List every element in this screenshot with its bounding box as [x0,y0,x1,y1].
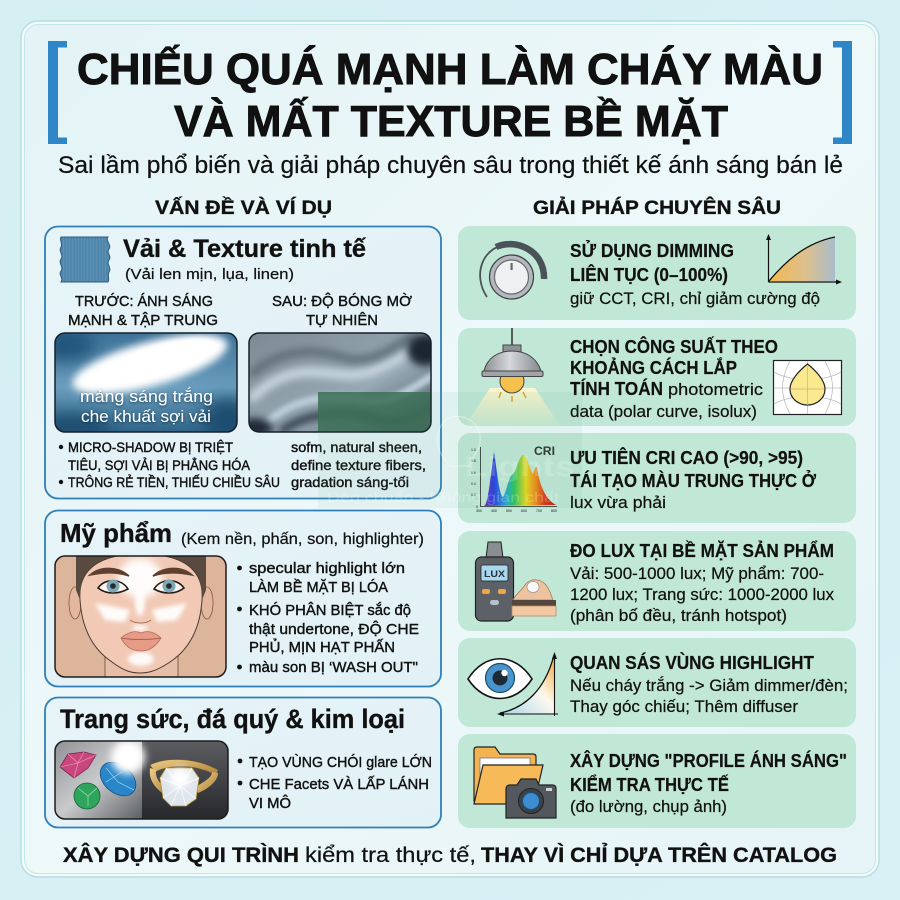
heading: in-depth solutions: GIẢI PHÁP CHUYÊN SÂU [533,197,781,219]
CRI text: ƯU TIÊN CRI CAO (>90, >95) [570,447,803,468]
before label: MẠNH & TẬP TRUNG [68,312,218,329]
icon: eye [468,659,532,698]
watermark: Đèn chuẩn - Không gian chất [327,489,559,505]
profile text [570,750,847,816]
lux text: 1200 lux; Trang sức: 1000-2000 lux [570,586,835,604]
card: high CRI [458,433,856,523]
card: lighting profile [458,734,856,828]
chart: light spectrum [471,446,557,513]
chart: light spectrum: 600 [521,509,527,513]
profile text: (đo lường, chụp ảnh) [570,798,727,816]
chart: light spectrum: 0.8 [471,459,476,463]
icon: pendant lamp [465,328,560,426]
lux text: ĐO LUX TẠI BỀ MẶT SẢN PHẨM [570,540,834,561]
left bracket [48,41,67,144]
cosmetics heading: Mỹ phẩm [60,518,172,548]
fabric heading: Vải & Texture tinh tế [123,235,366,263]
cosmetics bullet list: KHÓ PHÂN BIỆT sắc độ [249,602,411,619]
chart: light spectrum: 0.4 [471,482,476,486]
caption on image [80,387,213,426]
jewelry bullet list [238,754,432,812]
panel: fabric and texture [30,226,443,498]
before bullet list: MICRO-SHADOW BỊ TRIỆT [68,440,233,455]
before bullet list: TIÊU, SỢI VẢI BỊ PHẲNG HÓA [68,458,250,473]
footer takeaway: XÂY DỰNG QUI TRÌNH [63,843,299,867]
title: CHIẾU QUÁ MẠNH LÀM CHÁY MÀU [77,44,823,94]
after description [291,439,426,490]
lux text: Vải: 500-1000 lux; Mỹ phẩm: 700- [570,565,824,583]
wattage text: CHỌN CÔNG SUẤT THEO [570,336,778,357]
chart: light spectrum: 700 [536,509,542,513]
caption on image: mảng sáng trắng [80,387,213,406]
cosmetics bullet list: màu son BỊ ‘WASH OUT" [249,659,418,676]
caption on image: che khuất sợi vải [81,408,211,426]
after label: TỰ NHIÊN [306,312,378,329]
chart: polar isolux diagram [774,360,842,414]
icon: folder and camera [474,747,556,818]
cosmetics bullet list: specular highlight lớn [249,560,405,577]
card: observe highlight [458,638,856,727]
chart: light spectrum: 0.6 [471,471,476,475]
highlight text: Nếu cháy trắng -> Giảm dimmer/đèn; [570,676,848,695]
watermark [318,392,582,508]
cosmetics bullet list: thật undertone, ĐỘ CHE [249,621,419,638]
heading: problems and examples: VẤN ĐỀ VÀ VÍ DỤ [155,197,332,219]
card: dimming [458,226,856,320]
dimming text: giữ CCT, CRI, chỉ giảm cường độ [570,289,820,308]
watermark: Lights [465,451,575,482]
jewelry bullet list: VI MÔ [249,795,291,812]
chart: light spectrum: 500 [506,509,512,513]
chart: light spectrum: 0 [476,505,478,509]
chart: light spectrum: 300 [476,509,482,513]
jewelry bullet list: CHE Facets VÀ LẤP LÁNH [249,776,429,793]
before label [68,293,218,329]
highlight text [570,652,848,716]
lux text [570,540,835,625]
footer takeaway: kiểm tra thực tế, [305,844,476,867]
cosmetics bullet list [237,560,419,676]
dimming text: SỬ DỤNG DIMMING [570,240,734,261]
chart: light spectrum: 0.2 [471,493,476,497]
after label [272,293,412,329]
dimming text [570,240,820,308]
highlight text: Thay góc chiếu; Thêm diffuser [570,698,799,716]
chart: light spectrum: 400 [491,509,497,513]
card: measure lux [458,531,856,631]
jewelry heading: Trang sức, đá quý & kim loại [60,704,405,734]
jewelry bullet list: TẠO VÙNG CHÓI glare LỚN [249,754,432,771]
after description: gradation sáng-tối [291,474,409,490]
wattage text: photometric [668,381,763,399]
icon: fabric swatch [60,237,110,282]
chart: light spectrum: 1.0 [471,448,476,452]
profile text: KIỂM TRA THỰC TẾ [570,774,729,795]
before bullet list: TRÔNG RẺ TIỀN, THIẾU CHIỀU SÂU [68,475,280,490]
chart: light spectrum: CRI [534,446,555,458]
image: soft satin sheen [248,332,432,433]
after label: SAU: ĐỘ BÓNG MỜ [272,293,412,310]
subtitle: Sai lầm phổ biến và giải pháp chuyên sâu trong thiết kế ánh sáng bán lẻ [58,152,843,179]
icon: lux meter and product: LUX [484,569,506,580]
icon: lux meter and product [476,542,556,621]
title [77,44,823,146]
image: gems and diamond ring [55,740,228,819]
CRI text: lux vừa phải [570,493,666,512]
before bullet list [59,440,280,490]
profile text: XÂY DỰNG "PROFILE ÁNH SÁNG" [570,750,847,771]
chart: dimming curve [766,234,842,284]
footer takeaway: THAY VÌ CHỈ DỰA TRÊN CATALOG [481,843,837,867]
watermark tint over image [318,392,431,432]
image: overexposed fabric [54,332,238,433]
after description: sofm, natural sheen, [291,439,422,455]
title: VÀ MẤT TEXTURE BỀ MẶT [174,96,728,146]
cosmetics bullet list: LÀM BỀ MẶT BỊ LÓA [249,579,388,596]
footer takeaway [63,843,837,867]
cosmetics bullet list: PHỦ, MỊN HẠT PHẤN [249,638,395,656]
card: wattage by distance [458,328,856,426]
panel: cosmetics [45,510,441,686]
wattage text [570,336,778,421]
wattage text: data (polar curve, isolux) [570,403,757,421]
after description: define texture fibers, [291,457,426,473]
icon: dimmer knob [480,244,544,299]
image: face with shiny highlights [55,554,226,677]
highlight text: QUAN SÁS VÙNG HIGHLIGHT [570,652,814,673]
wattage text: TÍNH TOÁN [570,378,663,399]
CRI text [570,447,817,512]
right bracket [833,41,852,144]
wattage text: KHOẢNG CÁCH LẮP [570,357,737,378]
cosmetics subheading: (Kem nền, phấn, son, highlighter) [181,531,424,548]
before label: TRƯỚC: ÁNH SÁNG [75,293,213,310]
panel: jewelry [45,698,441,828]
chart: light spectrum: 800 [551,509,557,513]
CRI text: TÁI TẠO MÀU TRUNG THỰC Ở [570,470,817,491]
lux text: (phân bố đều, tránh hotspot) [570,607,787,625]
fabric subheading: (Vải len mịn, lụa, linen) [125,266,294,283]
dimming text: LIÊN TỤC (0–100%) [570,264,728,285]
chart: highlight curve [497,652,558,716]
